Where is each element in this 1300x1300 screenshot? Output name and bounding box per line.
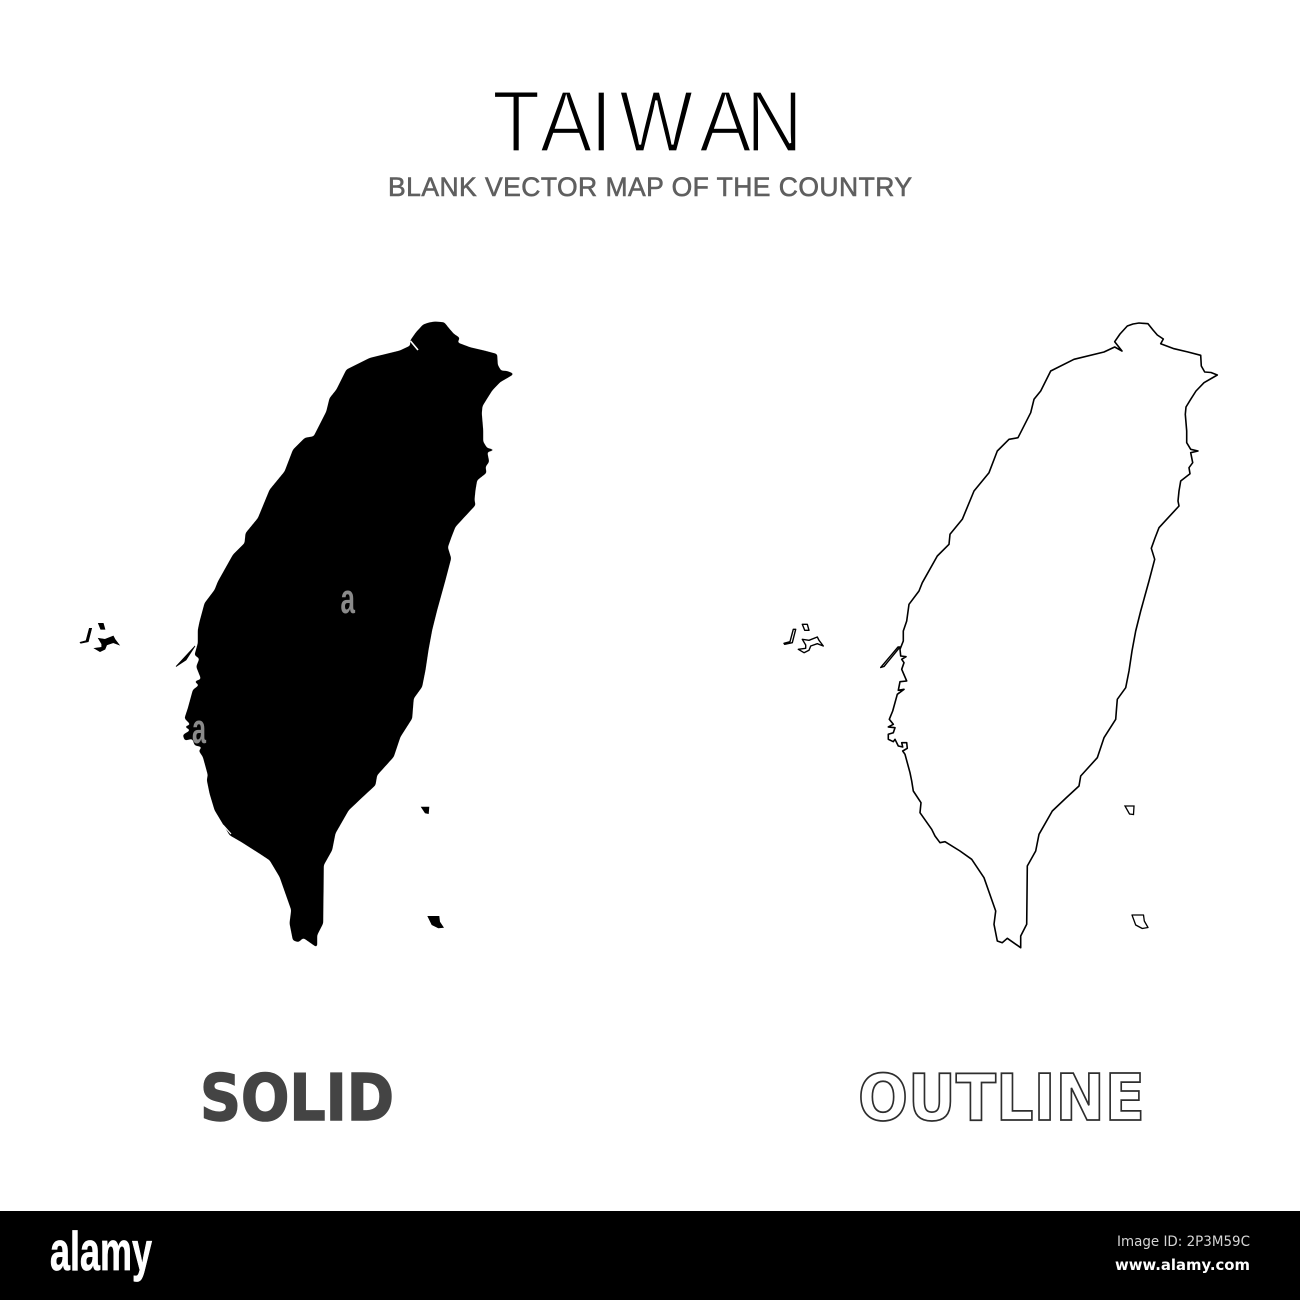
Green Island (421, 807, 429, 814)
Green Island outline (1125, 806, 1134, 814)
northern notch (410, 341, 418, 350)
Orchid Island (427, 916, 444, 928)
main island solid (183, 322, 513, 947)
footer bar (0, 1211, 1300, 1300)
solid label: SOLID (200, 1062, 394, 1136)
watermark letter center: a (340, 576, 355, 623)
west coast sliver island (176, 646, 195, 666)
watermark letter west coast: a (192, 707, 207, 753)
image id: Image ID: 2P3M59C (1117, 1234, 1250, 1250)
lagoon sliver outline (881, 647, 900, 668)
Orchid Island outline (1132, 915, 1148, 928)
alamy logo: alamy (50, 1220, 152, 1282)
solid map of Taiwan (80, 322, 513, 947)
subtitle: BLANK VECTOR MAP OF THE COUNTRY (388, 172, 912, 202)
outline label: OUTLINE (858, 1062, 1145, 1136)
Penghu islands outline (784, 624, 823, 653)
main island outline (888, 323, 1217, 948)
title: TAIWAN (492, 73, 803, 170)
southwest sliver (223, 825, 231, 834)
outline map of Taiwan (784, 323, 1217, 948)
website: www.alamy.com (1115, 1256, 1250, 1274)
Penghu islands (80, 623, 119, 652)
